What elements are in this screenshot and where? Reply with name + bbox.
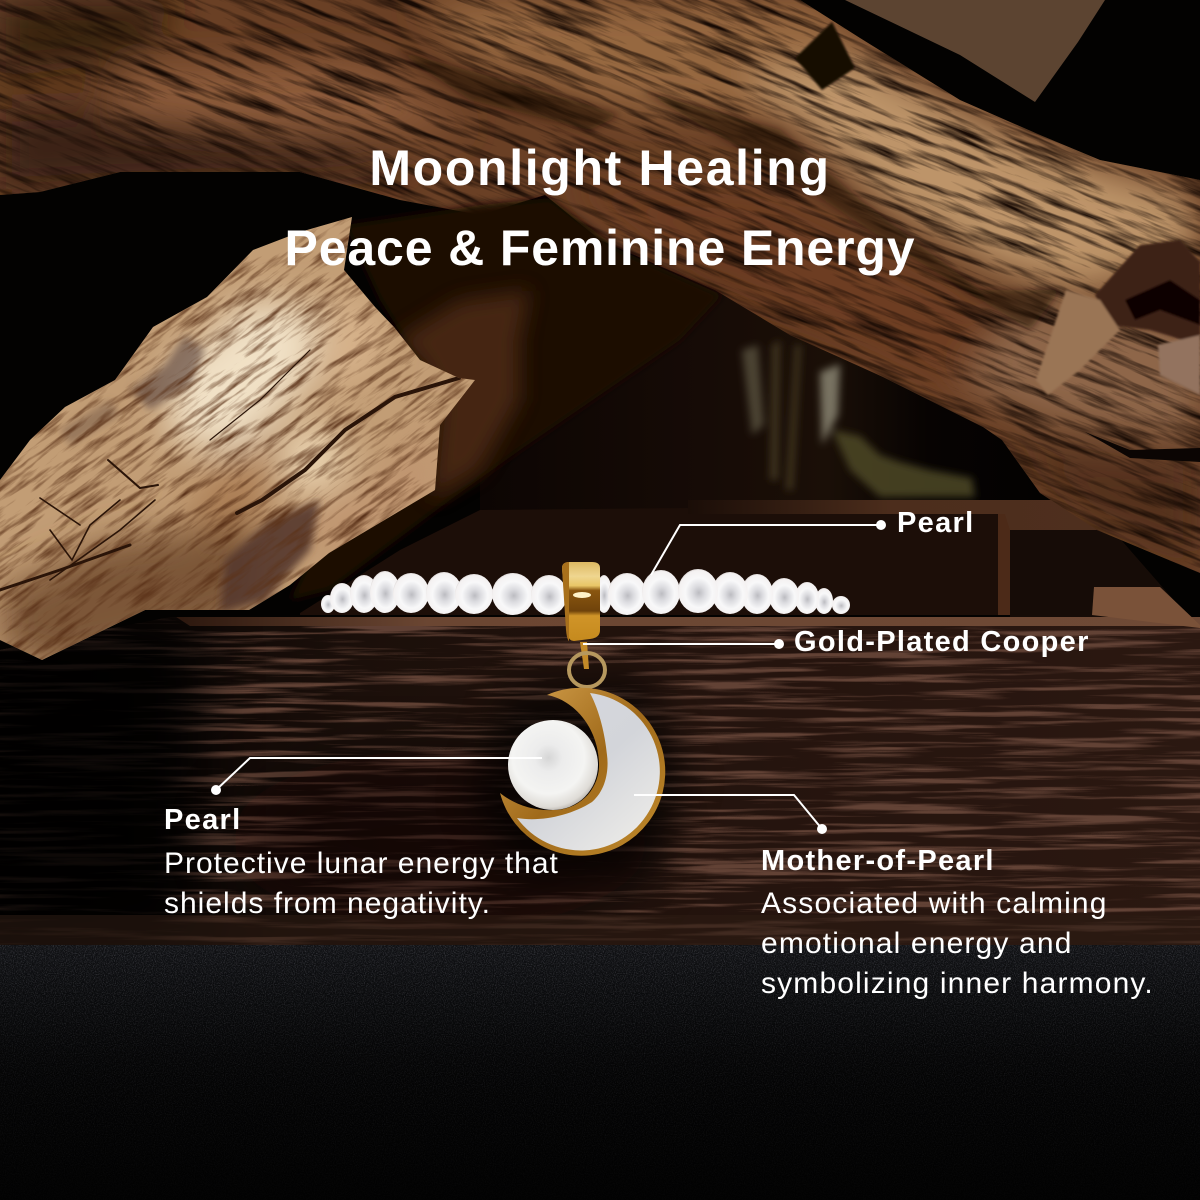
callout text: pearl: shields from negativity. xyxy=(164,887,491,920)
large broken knot at right xyxy=(1036,240,1200,395)
pearl strand xyxy=(321,569,850,615)
callout text: mother-of-pearl: emotional energy and xyxy=(761,927,1073,960)
driftwood upper limb xyxy=(0,0,1200,573)
cracks in lit wood xyxy=(0,350,459,590)
callout text: pearl: Pearl xyxy=(164,804,241,836)
wooden box front xyxy=(0,610,1200,950)
black cloth xyxy=(0,945,1200,1200)
title xyxy=(285,140,915,276)
crack at lower right of limb xyxy=(1085,432,1200,462)
callout text: mother-of-pearl xyxy=(761,845,1154,1000)
callout leader lines xyxy=(216,525,880,829)
callout dots xyxy=(211,520,886,834)
round pearl xyxy=(508,720,598,810)
callout text: mother-of-pearl: Mother-of-Pearl xyxy=(761,845,995,877)
background dried foliage xyxy=(742,340,975,497)
callout text: mother-of-pearl: Associated with calming xyxy=(761,887,1108,920)
knot hole at top of limb xyxy=(795,22,855,90)
title: Moonlight Healing xyxy=(369,140,831,196)
callout text: pearl: Protective lunar energy that xyxy=(164,847,559,880)
background driftwood, top right xyxy=(845,0,1105,102)
callout text: mother-of-pearl: symbolizing inner harmony. xyxy=(761,967,1154,1000)
driftwood lower limb, lit side xyxy=(0,217,475,660)
dark ridge across the limb xyxy=(395,50,1060,330)
warm glow on shaded side xyxy=(395,290,530,500)
callout label: gold-plated copper: Gold-Plated Cooper xyxy=(794,626,1090,658)
gold bail xyxy=(562,562,605,687)
callout text: pearl xyxy=(164,804,559,920)
box right rim plank xyxy=(1092,587,1200,628)
pendant shadow xyxy=(470,680,690,880)
hollow behind the box xyxy=(480,260,1040,510)
mother-of-pearl inlay xyxy=(517,693,660,850)
gold crescent frame xyxy=(500,688,665,856)
title: Peace & Feminine Energy xyxy=(285,220,915,276)
crescent moon pendant xyxy=(500,688,665,856)
box rear wall and rims xyxy=(300,500,1200,640)
callout label: pearl strand: Pearl xyxy=(897,507,974,539)
driftwood lower limb, shaded side xyxy=(290,198,722,600)
